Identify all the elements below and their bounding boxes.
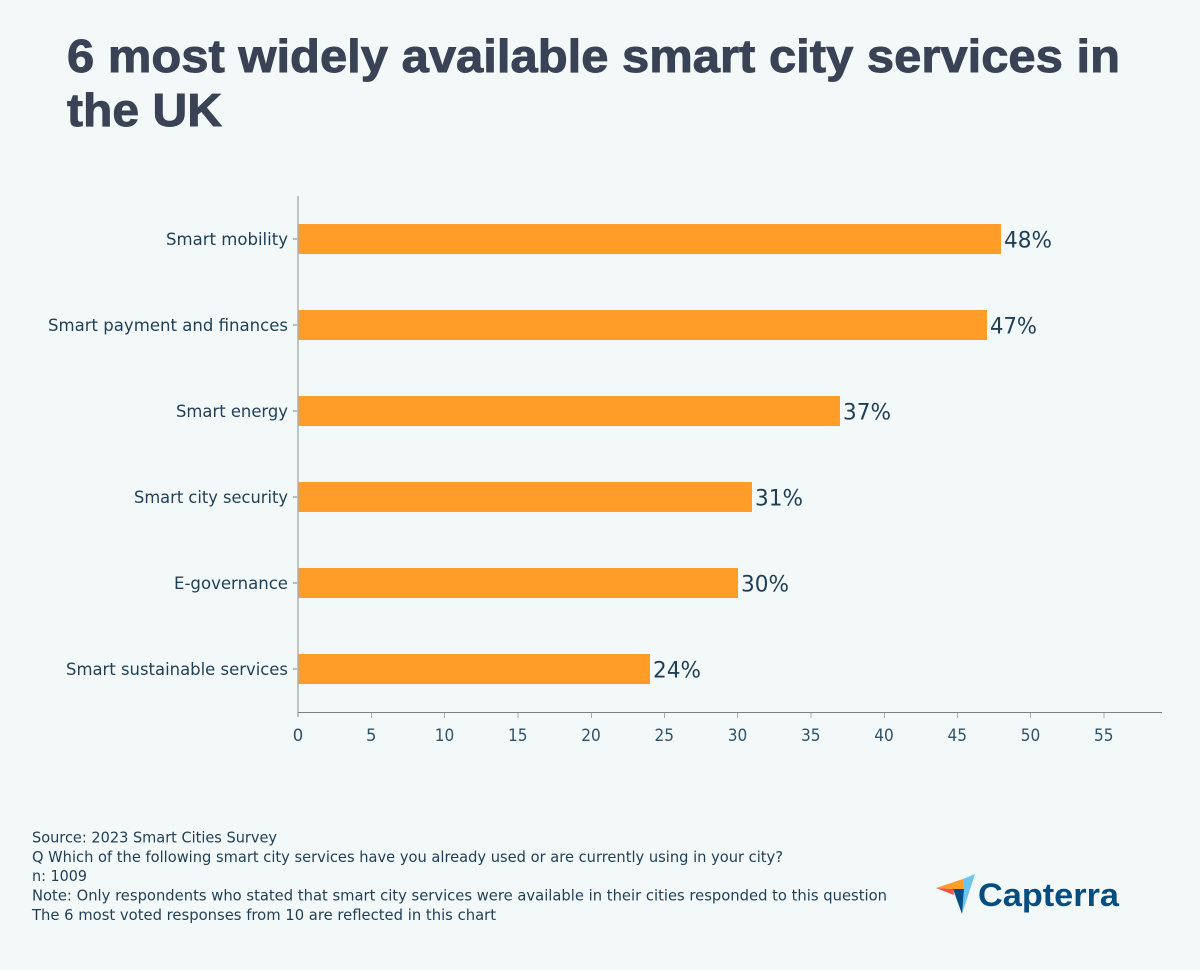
category labels: Smart mobility bbox=[166, 229, 288, 249]
source notes: n: 1009 bbox=[32, 867, 87, 885]
source notes bbox=[31, 828, 887, 924]
value labels: 47% bbox=[990, 314, 1037, 340]
x axis labels: 5 bbox=[366, 726, 377, 745]
value labels: 24% bbox=[653, 658, 701, 684]
x axis labels: 40 bbox=[874, 726, 894, 745]
title bbox=[67, 30, 1120, 136]
logo: Capterra bbox=[936, 874, 1119, 914]
title: the UK bbox=[67, 84, 222, 136]
source notes: Note: Only respondents who stated that smart city services were available in their cities responded to this question bbox=[32, 886, 887, 904]
x axis labels: 50 bbox=[1021, 726, 1040, 745]
category labels: Smart energy bbox=[176, 401, 288, 421]
x axis labels: 45 bbox=[948, 726, 967, 745]
value labels: 48% bbox=[1004, 228, 1052, 254]
x axis labels bbox=[293, 726, 1114, 745]
bar chart bbox=[48, 196, 1162, 745]
source notes: Source: 2023 Smart Cities Survey bbox=[32, 828, 277, 846]
x axis labels: 35 bbox=[801, 726, 821, 745]
x axis labels: 10 bbox=[435, 726, 454, 745]
x axis labels: 0 bbox=[293, 726, 303, 745]
value labels bbox=[653, 228, 1052, 684]
wordmark: Capterra bbox=[978, 877, 1119, 913]
category labels: E-governance bbox=[174, 573, 288, 593]
source notes: Q Which of the following smart city services have you already used or are currently using in your city? bbox=[32, 848, 783, 866]
value labels: 37% bbox=[843, 400, 891, 426]
x axis labels: 55 bbox=[1094, 726, 1114, 745]
category labels: Smart payment and finances bbox=[48, 315, 288, 335]
x axis labels: 25 bbox=[655, 726, 674, 745]
x axis labels: 20 bbox=[581, 726, 601, 745]
value labels: 30% bbox=[741, 572, 789, 598]
x axis labels: 30 bbox=[728, 726, 747, 745]
category labels bbox=[48, 229, 288, 679]
category labels: Smart city security bbox=[134, 487, 288, 507]
title: 6 most widely available smart city services in bbox=[67, 30, 1120, 82]
axes bbox=[293, 196, 1162, 718]
source notes: The 6 most voted responses from 10 are reflected in this chart bbox=[31, 906, 496, 924]
category labels: Smart sustainable services bbox=[66, 659, 288, 679]
value labels: 31% bbox=[755, 486, 803, 512]
x axis labels: 15 bbox=[508, 726, 528, 745]
icon: paper plane bbox=[936, 874, 975, 914]
bars bbox=[298, 224, 1001, 684]
